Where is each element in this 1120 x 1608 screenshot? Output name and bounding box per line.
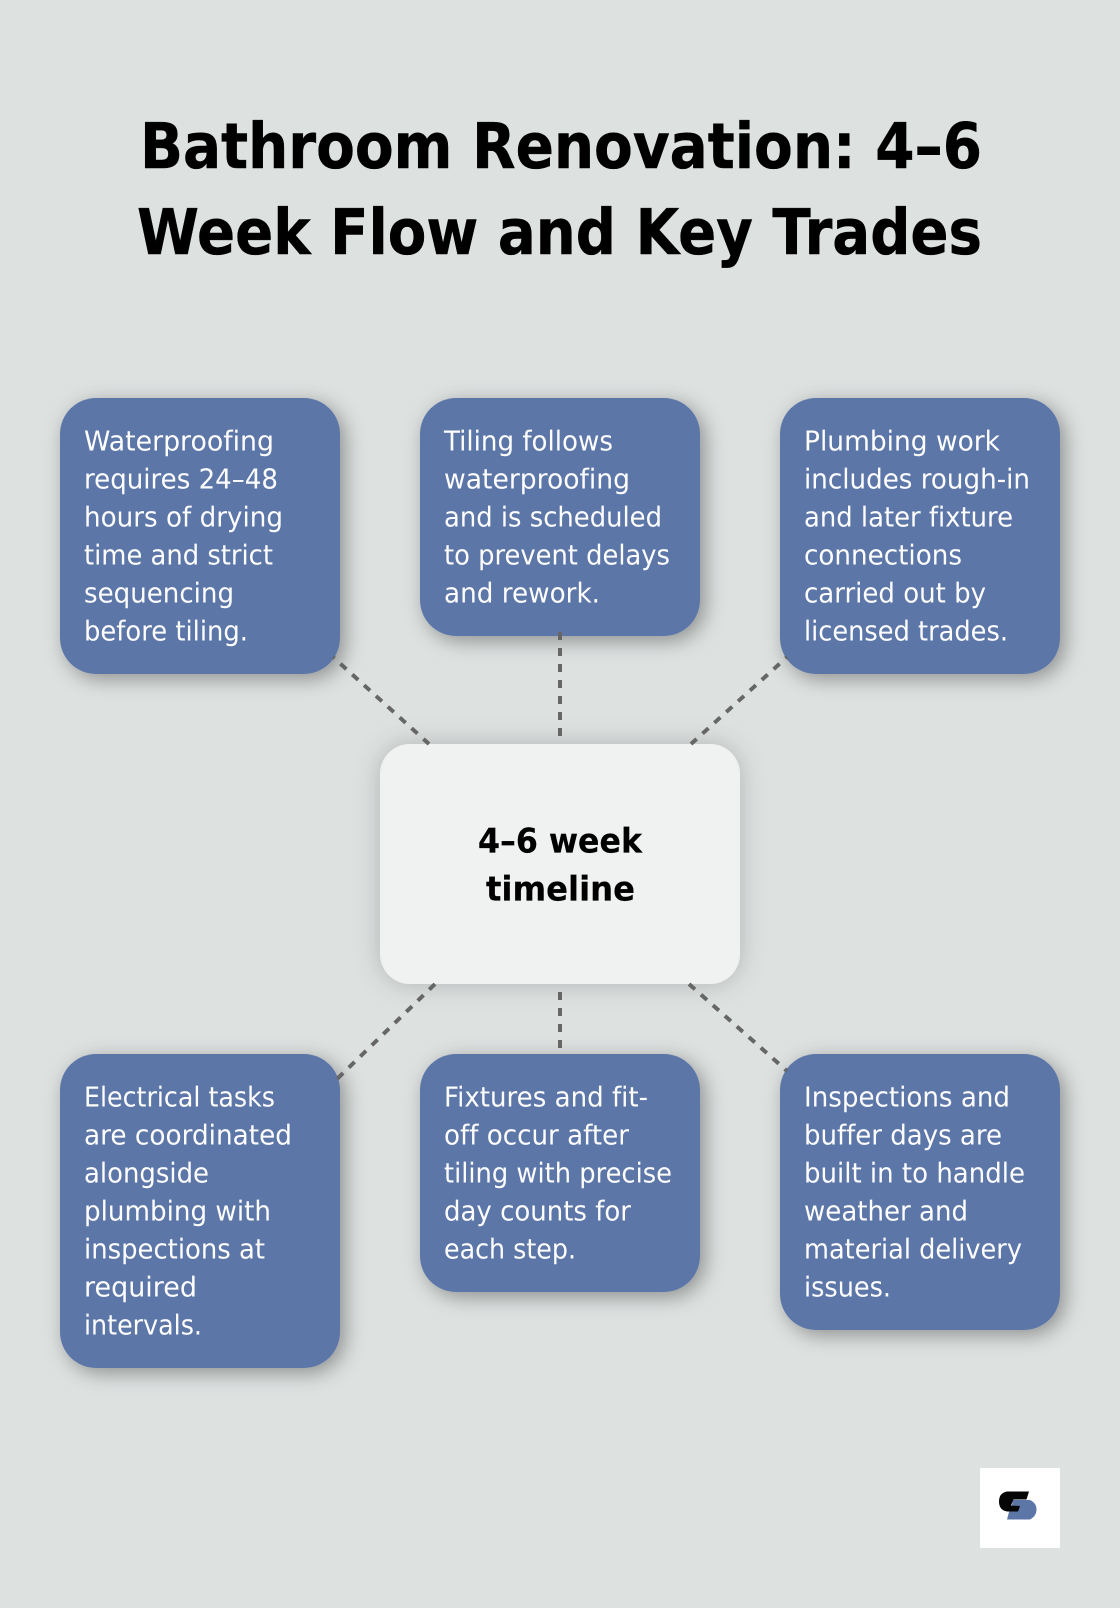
- centre box: 4–6 week timeline: [380, 744, 740, 984]
- title: Week Flow and Key Trades: [137, 196, 982, 269]
- centre box: 4–6 week timeline: timeline: [486, 870, 635, 910]
- card: plumbing: and later fixture: [804, 502, 1013, 534]
- card: electrical: Electrical tasks: [84, 1082, 275, 1114]
- card: electrical: alongside: [84, 1158, 209, 1190]
- card: waterproofing: hours of drying: [84, 502, 283, 534]
- card: electrical: required: [84, 1272, 197, 1304]
- card: waterproofing: requires 24–48: [84, 464, 278, 496]
- card: waterproofing: before tiling.: [84, 616, 248, 648]
- card: waterproofing: [60, 398, 340, 674]
- card: inspections: Inspections and: [804, 1082, 1010, 1114]
- card: electrical: plumbing with: [84, 1196, 271, 1228]
- card: electrical: are coordinated: [84, 1120, 292, 1152]
- card: tiling: and is scheduled: [444, 502, 662, 534]
- card: fixtures: off occur after: [444, 1120, 630, 1152]
- title: [137, 110, 982, 269]
- card: tiling: and rework.: [444, 578, 600, 610]
- card: plumbing: [780, 398, 1060, 674]
- card: inspections: [780, 1054, 1060, 1330]
- card: fixtures: Fixtures and fit-: [444, 1082, 648, 1114]
- card: inspections: material delivery: [804, 1234, 1022, 1266]
- card: tiling: Tiling follows: [443, 426, 613, 458]
- card: waterproofing: time and strict: [84, 540, 273, 572]
- card: waterproofing: Waterproofing: [84, 426, 274, 458]
- card: inspections: buffer days are: [804, 1120, 1002, 1152]
- card: tiling: waterproofing: [444, 464, 630, 496]
- card: waterproofing: sequencing: [84, 578, 234, 610]
- card: inspections: built in to handle: [804, 1158, 1025, 1190]
- card: plumbing: connections: [804, 540, 962, 572]
- card: inspections: issues.: [804, 1272, 891, 1304]
- dashed connectors: [333, 632, 787, 1079]
- card: fixtures: [420, 1054, 700, 1292]
- card: electrical: intervals.: [84, 1310, 202, 1342]
- card: tiling: to prevent delays: [444, 540, 670, 572]
- card: fixtures: tiling with precise: [444, 1158, 672, 1190]
- card: electrical: inspections at: [84, 1234, 265, 1266]
- card: electrical: [60, 1054, 340, 1368]
- title: Bathroom Renovation: 4–6: [140, 110, 982, 183]
- card: plumbing: Plumbing work: [804, 426, 1000, 458]
- card: fixtures: each step.: [444, 1234, 576, 1266]
- logo badge: [980, 1468, 1060, 1548]
- card: fixtures: day counts for: [444, 1196, 632, 1228]
- card: plumbing: includes rough-in: [804, 464, 1030, 496]
- card: tiling: [420, 398, 700, 636]
- centre box: 4–6 week timeline: 4–6 week: [478, 822, 643, 862]
- card: inspections: weather and: [804, 1196, 968, 1228]
- card: plumbing: carried out by: [804, 578, 986, 610]
- card: plumbing: licensed trades.: [804, 616, 1008, 648]
